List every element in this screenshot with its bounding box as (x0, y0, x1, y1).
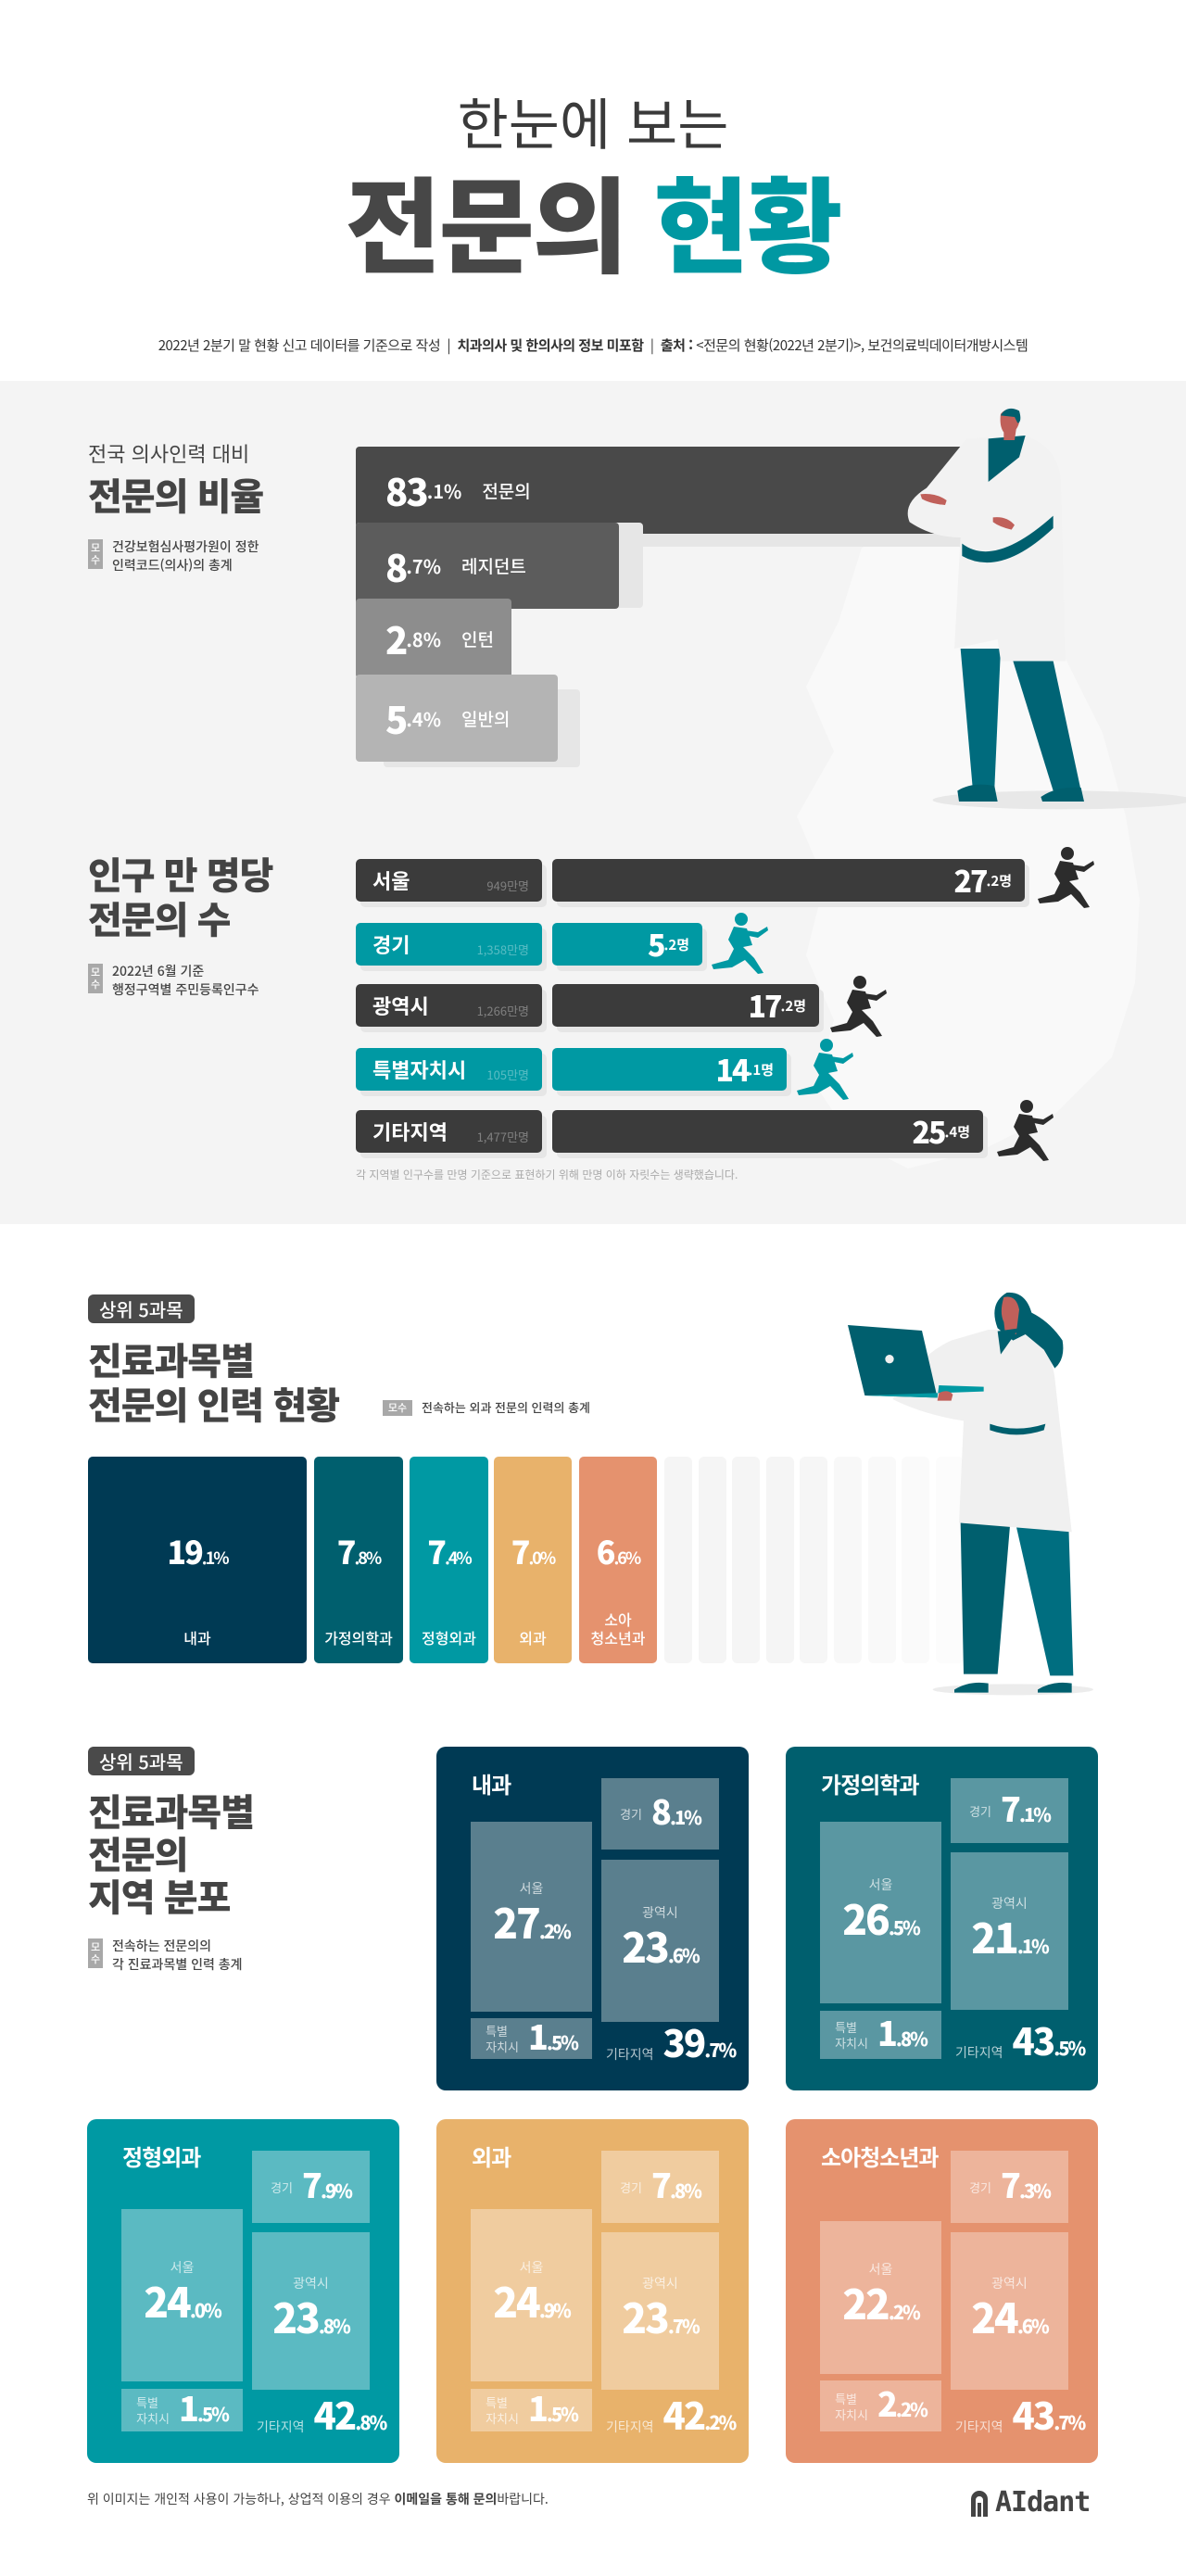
panel: 가정의학과: 26.5% (842, 1887, 919, 1946)
panel: 외과: 23.7% (622, 2285, 699, 2344)
panel: 정형외과 (87, 2119, 399, 2463)
note: 모수 (88, 962, 259, 999)
panel: 정형외과: 광역시 (293, 2274, 329, 2292)
logo: AIdant: AIdant (995, 2486, 1090, 2519)
bar: 외과 (494, 1457, 572, 1663)
row: 특별자치시: 14 (715, 1048, 748, 1091)
note: 모수 (88, 537, 259, 575)
panel: 소아청소년과: 경기 (969, 2178, 991, 2196)
panel: 가정의학과: 경기 (969, 1801, 991, 1820)
panel: 외과: 24.9% (493, 2270, 570, 2330)
heading: 인구 만 명당 전문의 수: 전문의 수 (88, 890, 230, 944)
row: 특별자치시: 특별자치시 (372, 1054, 466, 1084)
note: 모수: 모수 (91, 1939, 100, 1966)
panel: 가정의학과: 43.5% (1013, 2013, 1084, 2066)
illustration: doctor arms crossed (908, 408, 1186, 810)
panel: 외과: 외과 (472, 2140, 511, 2172)
bar: 외과: 7.0% (511, 1528, 554, 1573)
badge: 상위 5과목: 상위 5과목 (99, 1748, 183, 1774)
panel: 소아청소년과: 24.6% (971, 2285, 1048, 2344)
title: main: 전문의 현황 (346, 145, 840, 295)
panel: 내과: 8.1% (651, 1787, 700, 1835)
panel: 소아청소년과: 22.2% (842, 2272, 919, 2331)
heading: 전문의 비율: 전국 의사인력 대비 (88, 438, 249, 468)
heading: 전문의 비율 (88, 438, 263, 575)
panel: 소아청소년과: 자치시 (835, 2406, 868, 2422)
bar: 소아청소년과: 소아 (604, 1608, 632, 1630)
bar: 8.7% (356, 523, 619, 609)
bar: 소아청소년과: 청소년과 (591, 1626, 645, 1648)
panel: 가정의학과: 7.1% (1001, 1783, 1050, 1831)
panel: 가정의학과: 1.8% (877, 2007, 927, 2055)
bar: 83.1%: 83 (385, 463, 427, 517)
heading: 진료과목별 전문의 인력 현황 (88, 1332, 339, 1430)
bar: 5.4%: 일반의 (461, 706, 510, 730)
row: 광역시: .2명 (780, 995, 806, 1016)
heading: 인구 만 명당 전문의 수 (88, 846, 272, 999)
bar: 내과: 19.1% (167, 1528, 228, 1573)
panel: 소아청소년과: 서울 (869, 2260, 892, 2279)
panel: 외과: 광역시 (642, 2274, 678, 2292)
icon: runner 광역시 (830, 976, 887, 1037)
bar: 2.8%: 인턴 (461, 626, 494, 650)
bar: 가정의학과 (314, 1457, 403, 1663)
bar: 5.4%: .4% (406, 704, 441, 732)
panel: 소아청소년과 (786, 2119, 1098, 2463)
icon: runner 경기 (712, 913, 768, 974)
bar: 내과: 내과 (183, 1626, 211, 1648)
panel: 내과: 광역시 (642, 1903, 678, 1922)
heading: 진료과목별 전문의 인력 현황: 진료과목별 (88, 1332, 254, 1385)
note: 모수: 2022년 6월 기준 (112, 962, 204, 980)
footer note: 위 이미지는 개인적 사용이 가능하나, 상업적 이용의 경우 이메일을 통해 문의바랍니다. (87, 2490, 549, 2508)
row: 서울: .2명 (986, 871, 1012, 890)
panel: 소아청소년과: 2.2% (877, 2379, 927, 2427)
heading: 진료과목별 전문의 지역 분포: 전문의 (88, 1825, 187, 1879)
panel: 외과: 1.5% (528, 2383, 577, 2431)
panel: 내과: 내과 (472, 1767, 511, 1799)
panel: 외과: 자치시 (486, 2409, 519, 2427)
illustration: doctor with laptop (848, 1292, 1093, 1696)
note: 모수: 모수 (91, 540, 100, 567)
bar: 5.4%: 5 (385, 691, 406, 745)
row: 기타지역: 25 (912, 1110, 944, 1153)
bar: 정형외과: 7.4% (427, 1528, 471, 1573)
bar: 2.8%: .8% (406, 625, 441, 652)
panel: 정형외과: 서울 (170, 2257, 194, 2276)
panel: 외과: 서울 (520, 2257, 543, 2276)
panel: 가정의학과: 가정의학과 (821, 1767, 918, 1799)
panel: 가정의학과: 서울 (869, 1875, 892, 1894)
note: 모수: 각 진료과목별 인력 총계 (112, 1955, 243, 1974)
row: 서울 (356, 859, 1029, 907)
panel: 소아청소년과: 광역시 (991, 2274, 1028, 2292)
icon: runner 서울 (1038, 847, 1094, 908)
panel: 정형외과: 42.8% (314, 2387, 385, 2441)
note: 모수: 전속하는 전문의의 (112, 1937, 211, 1955)
panel: 가정의학과: 기타지역 (955, 2043, 1003, 2062)
panel: 정형외과: 7.9% (302, 2159, 351, 2207)
panel: 정형외과: 23.8% (272, 2285, 349, 2344)
row: 경기: .2명 (663, 934, 689, 954)
bar: 83.1%: 전문의 (482, 478, 531, 502)
panel: 소아청소년과: 기타지역 (955, 2418, 1003, 2436)
note: 모수: 인력코드(의사)의 총계 (112, 556, 233, 575)
bar: 가정의학과: 7.8% (337, 1528, 380, 1573)
row: 기타지역: 1,477만명 (477, 1127, 529, 1145)
row: 특별자치시 (356, 1048, 791, 1096)
panel: 내과 (436, 1747, 749, 2090)
heading: 전문의 비율: 전문의 비율 (88, 467, 263, 521)
row: 서울: 서울 (372, 865, 410, 895)
row: 서울: 949만명 (486, 877, 529, 893)
note: 모수: 모수 (91, 965, 100, 991)
row: 경기: 1,358만명 (477, 940, 529, 958)
panel: 정형외과: 경기 (271, 2178, 293, 2196)
note: 모수 (88, 1937, 243, 1974)
source line: 2022년 2분기 말 현황 신고 데이터를 기준으로 작성 | 치과의사 및 한의사의 정보 미포함 | 출처 : <전문의 현황(2022년 2분기)>, 보건의료빅데이터개방시스템 (158, 335, 1028, 355)
bar: 정형외과 (410, 1457, 488, 1663)
panel: 외과: 경기 (620, 2178, 642, 2196)
map background (0, 381, 1186, 1224)
bar: 내과 (88, 1457, 307, 1663)
bar: 8.7%: 8 (385, 539, 406, 593)
row: 경기: 5 (648, 923, 663, 966)
panel: 가정의학과 (786, 1747, 1098, 2090)
chart: per-10k specialists (356, 859, 1029, 1158)
row: 광역시: 광역시 (372, 991, 429, 1020)
panel: gray section (0, 381, 1186, 1224)
bar: 5.4% (356, 675, 558, 762)
note: 모수: 모수 (388, 1399, 407, 1414)
heading: 진료과목별 전문의 지역 분포: 지역 분포 (88, 1868, 230, 1922)
panel: 외과 (436, 2119, 749, 2463)
row: 특별자치시: .1명 (748, 1060, 774, 1079)
icon: runner 기타지역 (997, 1100, 1054, 1161)
bar chart: ratio (356, 447, 960, 767)
row: 광역시 (356, 984, 824, 1032)
row: 기타지역: .4명 (944, 1121, 970, 1142)
panel: 가정의학과: 광역시 (991, 1894, 1028, 1913)
row: 특별자치시: 105만명 (486, 1066, 529, 1082)
panel: 내과: 23.6% (622, 1915, 699, 1975)
row: 서울: 27 (953, 859, 986, 902)
panel: 가정의학과: 특별 (835, 2018, 857, 2036)
panel: 내과: 39.7% (663, 2014, 735, 2068)
bar: 외과: 외과 (519, 1626, 547, 1648)
panel: 내과: 27.2% (493, 1891, 570, 1951)
heading: 진료과목별 전문의 인력 현황: 전문의 인력 현황 (88, 1376, 339, 1430)
panel: 정형외과: 1.5% (179, 2383, 228, 2431)
panel: 내과: 경기 (620, 1805, 642, 1823)
panel: 외과: 42.2% (663, 2387, 735, 2441)
panel: 내과: 자치시 (486, 2038, 519, 2055)
row: 기타지역: 기타지역 (372, 1117, 448, 1146)
panel: 외과: 특별 (486, 2393, 508, 2411)
panel: 정형외과: 정형외과 (122, 2140, 200, 2172)
title: subtitle line: 한눈에 보는 (458, 81, 728, 161)
row: 광역시: 17 (748, 984, 780, 1027)
panel: 정형외과: 24.0% (144, 2270, 221, 2330)
panel: 가정의학과: 자치시 (835, 2034, 868, 2052)
note: 모수: 행정구역별 주민등록인구수 (112, 980, 259, 999)
bar: 8.7%: 레지던트 (461, 553, 526, 578)
row: 경기: 경기 (372, 929, 410, 959)
row: 광역시: 1,266만명 (477, 1001, 529, 1019)
panel: 내과: 1.5% (528, 2011, 577, 2059)
heading: 진료과목별 전문의 지역 분포 (88, 1783, 254, 1922)
badge: 상위 5과목: 상위 5과목 (99, 1295, 183, 1322)
panel: 정형외과: 특별 (136, 2393, 158, 2411)
bar: 8.7%: .7% (406, 552, 441, 579)
panel: 내과: 기타지역 (606, 2045, 654, 2064)
panel: 소아청소년과: 7.3% (1001, 2159, 1050, 2207)
panel: 소아청소년과: 소아청소년과 (821, 2140, 938, 2172)
panel: 정형외과: 기타지역 (257, 2418, 305, 2436)
icon: runner 특별자치시 (797, 1039, 853, 1100)
panel: 소아청소년과: 특별 (835, 2389, 857, 2407)
note: 모수: 전속하는 외과 전문의 인력의 총계 (422, 1398, 590, 1416)
panel: 외과: 기타지역 (606, 2418, 654, 2436)
panel: 가정의학과: 21.1% (971, 1905, 1048, 1964)
bar: 가정의학과: 가정의학과 (324, 1626, 393, 1648)
panel: 내과: 서울 (520, 1879, 543, 1898)
panel: 외과: 7.8% (651, 2159, 700, 2207)
heading: 인구 만 명당 전문의 수: 인구 만 명당 (88, 846, 272, 900)
panel: 내과: 특별 (486, 2022, 508, 2039)
bar: 83.1% (356, 447, 982, 534)
panel: 소아청소년과: 43.7% (1013, 2387, 1084, 2441)
bar: 정형외과: 정형외과 (422, 1626, 476, 1648)
row: 경기 (356, 923, 707, 971)
row: 기타지역 (356, 1110, 988, 1158)
bar chart: top 5 specialties (88, 1457, 657, 1663)
bar: 소아청소년과 (579, 1457, 657, 1663)
bar: 소아청소년과: 6.6% (597, 1528, 639, 1573)
panel: 정형외과: 자치시 (136, 2409, 170, 2427)
footnote: 각 지역별 인구수를 만명 기준으로 표현하기 위해 만명 이하 자릿수는 생략했습니다. (356, 1167, 738, 1182)
note: 모수: 건강보험심사평가원이 정한 (112, 537, 259, 556)
heading: 진료과목별 전문의 지역 분포: 진료과목별 (88, 1783, 254, 1837)
bar: 2.8% (356, 599, 511, 678)
bar: 83.1%: .1% (427, 476, 461, 504)
bar: 2.8%: 2 (385, 612, 406, 665)
